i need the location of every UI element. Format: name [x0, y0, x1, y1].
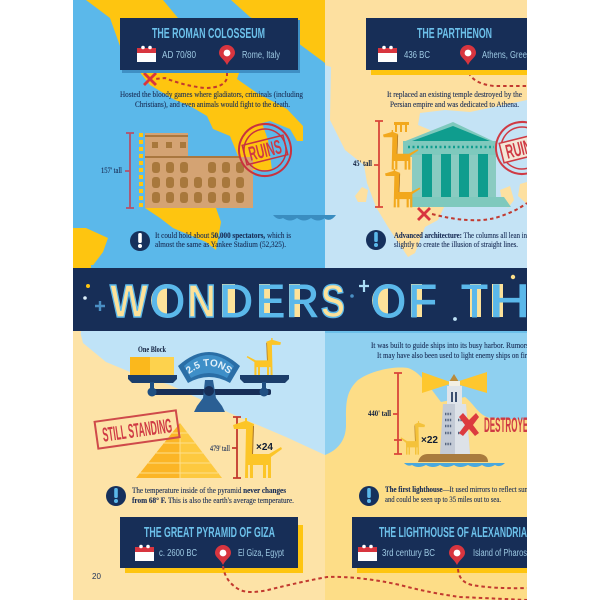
title: THE GREAT PYRAMID OF GIZA	[144, 524, 275, 541]
map: islands	[355, 182, 527, 208]
illustration: small giraffe	[247, 338, 281, 375]
icon: calendar	[358, 545, 377, 561]
panel: Lighthouse	[325, 331, 534, 600]
illustration: pyramid	[136, 423, 222, 478]
illustration: giraffe	[233, 418, 282, 478]
fact text	[385, 485, 528, 504]
map: sea	[325, 65, 527, 266]
fact text	[155, 231, 291, 249]
stamp: ruins	[238, 122, 292, 178]
title: Wonders of the	[110, 275, 561, 327]
fact text: slightly to create the illusion of straight lines.	[394, 240, 518, 249]
height measure: 479' tall	[210, 444, 231, 453]
map: land	[325, 368, 527, 600]
title: Wonders of the: S	[321, 275, 345, 327]
multiplier: ×24	[256, 442, 273, 453]
illustration: giraffe	[400, 421, 425, 455]
title: Wonders of the: W	[110, 275, 149, 327]
fact text: and could be seen up to 35 miles out to sea.	[385, 495, 501, 504]
title: Wonders of the: O	[371, 275, 406, 327]
icon: alert	[366, 230, 386, 250]
icon: destination X	[143, 72, 157, 86]
panel: Parthenon	[325, 0, 527, 265]
date: c. 2600 BC	[159, 548, 197, 559]
date: 436 BC	[404, 50, 430, 61]
route lines, lower page	[223, 566, 527, 600]
header box	[120, 517, 303, 573]
title: Wonders of the: H	[489, 275, 530, 327]
intro text	[371, 341, 532, 360]
illustration: colosseum	[145, 133, 253, 208]
icon: map pin	[219, 45, 235, 65]
icon: destination X	[417, 207, 431, 221]
page number: 20	[92, 572, 101, 581]
route line	[469, 75, 526, 87]
intro text: It was built to guide ships into its busy harbor. Rumors	[371, 341, 529, 350]
intro text: Hosted the bloody games where gladiators, criminals (including	[120, 90, 303, 99]
illustration: balance scale	[128, 375, 289, 412]
location: El Giza, Egypt	[238, 548, 284, 559]
height measure: 440' tall	[368, 409, 392, 418]
title: Wonders of the: D	[219, 275, 253, 327]
icon: calendar	[137, 46, 156, 62]
title: Wonders of the: R	[286, 275, 319, 327]
header box	[120, 18, 300, 73]
panel: Great Pyramid	[73, 333, 325, 600]
illustration: stacked giraffes	[383, 122, 420, 207]
map: sea	[80, 331, 325, 455]
icon: destroyed X	[459, 413, 479, 436]
waves	[325, 215, 336, 220]
intro text: Persian empire and was dedicated to Athena.	[390, 100, 519, 109]
intro text	[120, 90, 303, 109]
fact text: almost the same as Yankee Stadium (52,325).	[155, 240, 286, 249]
height measure	[368, 373, 402, 454]
icon: map pin	[215, 545, 231, 565]
intro text: It may have also been used to light enemy ships on fire.	[377, 351, 532, 360]
illustration: block	[130, 357, 174, 375]
fact text: The first lighthouse—It used mirrors to reflect sun	[385, 485, 528, 494]
height measure	[101, 133, 134, 208]
title: Wonders of the: T	[461, 275, 488, 327]
sparkles	[83, 275, 515, 321]
intro text: It replaced an existing temple destroyed by the	[387, 90, 522, 99]
icon: alert	[106, 486, 126, 506]
location: Island of Pharos	[473, 548, 527, 559]
stamp: ruins: RUINS	[504, 134, 541, 164]
title: Wonders of the: N	[187, 275, 216, 327]
gauge: 2.5 tons	[178, 352, 240, 383]
fact text: Advanced architecture: The columns all lean in	[394, 231, 527, 240]
illustration: lighthouse	[404, 372, 505, 467]
height measure: 45' tall	[353, 159, 373, 168]
fact text	[394, 231, 527, 249]
title: Wonders of the: E	[256, 275, 285, 327]
header box	[366, 18, 535, 75]
fact text: from 68° F. This is also the earth's average temperature.	[132, 496, 294, 505]
icon: calendar	[378, 46, 397, 62]
fact text	[132, 486, 294, 505]
icon: alert	[130, 231, 150, 251]
height measure	[210, 417, 241, 478]
title: Wonders of the: O	[150, 275, 185, 327]
date: 3rd century BC	[382, 548, 435, 559]
map: Balkans	[231, 0, 325, 63]
panel: Roman Colosseum	[73, 0, 336, 268]
icon: alert	[359, 486, 379, 506]
stamp: ruins	[494, 120, 527, 176]
multiplier: ×22	[421, 435, 438, 446]
map: Italy	[86, 0, 303, 250]
map: Africa coast	[73, 228, 108, 268]
header box	[352, 517, 532, 573]
date: AD 70/80	[162, 50, 196, 61]
location: Rome, Italy	[242, 50, 280, 61]
icon: calendar	[135, 545, 154, 561]
route line	[156, 73, 228, 89]
title: THE PARTHENON	[417, 25, 492, 42]
label: one block: One Block	[138, 345, 166, 354]
location: Athens, Greece	[482, 50, 535, 61]
banner	[73, 265, 561, 333]
stamp: still standing	[95, 410, 180, 449]
height measure	[353, 121, 383, 207]
panel: Great Pyramid: STILL STANDING	[101, 415, 173, 447]
title: Wonders of the: E	[534, 275, 561, 327]
icon: map pin	[460, 45, 476, 65]
intro text	[387, 90, 522, 109]
waves	[273, 215, 325, 220]
intro text: Christians), and even animals would fight to the death.	[135, 100, 290, 109]
illustration: giraffes beside colosseum	[139, 133, 143, 207]
icon: map pin	[449, 545, 465, 565]
height measure: 157' tall	[101, 166, 123, 175]
stamp: ruins: RUINS	[247, 136, 284, 166]
title: THE ROMAN COLOSSEUM	[152, 25, 265, 42]
gauge: 2.5 tons: 2.5 TONS	[186, 358, 232, 374]
title: Wonders of the: F	[408, 275, 437, 327]
fact text: It could hold about 50,000 spectators, which is	[155, 231, 291, 240]
fact text: The temperature inside of the pyramid never changes	[132, 486, 286, 495]
illustration: temple	[403, 122, 511, 207]
